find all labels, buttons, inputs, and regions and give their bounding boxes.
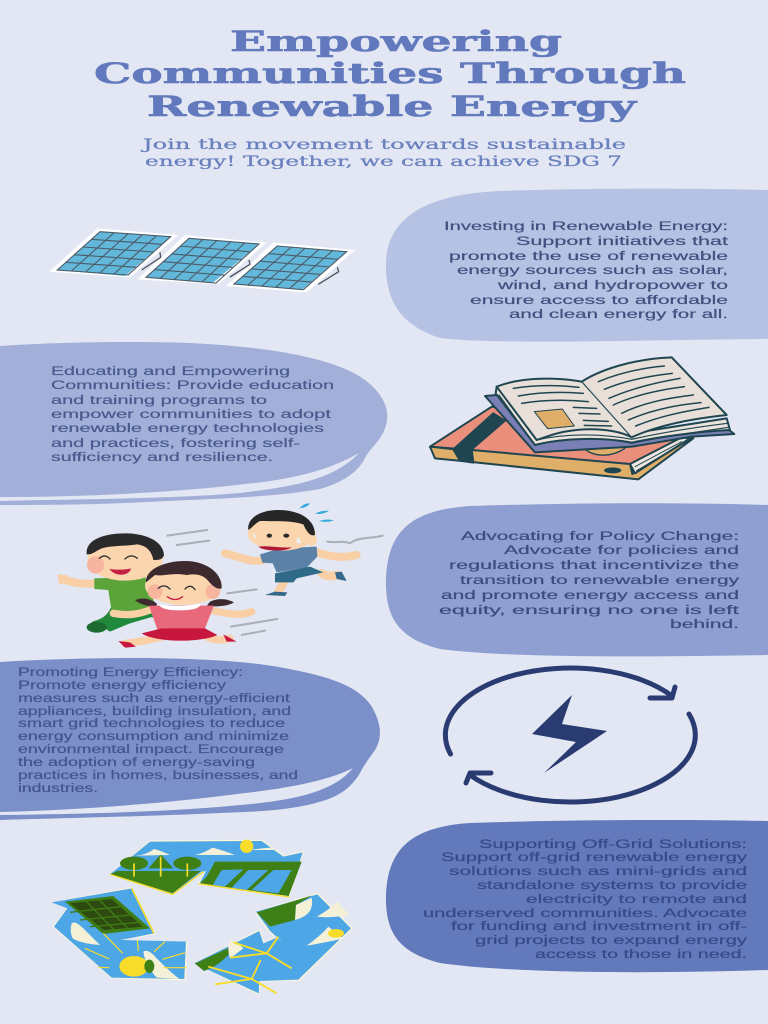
title: Communities Through	[94, 57, 686, 90]
panel: supporting off-grid solutions	[386, 820, 768, 972]
text: promoting: practices in homes, businesses, and	[18, 768, 298, 782]
icon: solar panels	[49, 228, 355, 292]
text: promoting: measures such as energy-efficient	[18, 691, 291, 705]
text: advocating	[439, 529, 741, 631]
icon: energy cycle	[445, 668, 695, 802]
text: advocating: and promote energy access and	[441, 588, 739, 602]
text: supporting: standalone systems to provide	[477, 878, 747, 892]
text: promoting: industries.	[18, 781, 98, 795]
arrow: wind turbines	[193, 893, 353, 995]
text: investing: promote the use of renewable	[449, 249, 728, 263]
text: investing: Investing in Renewable Energy:	[444, 219, 728, 233]
text: promoting: Promote energy efficiency	[18, 678, 227, 692]
arrow: forest and dam	[110, 840, 304, 897]
illustration: recycling symbol of renewable energy	[52, 840, 353, 995]
icon: stack of books	[430, 357, 734, 479]
panel: educating and empowering communities	[0, 342, 387, 505]
text: investing: wind, and hydropower to	[496, 278, 728, 292]
text: investing: ensure access to affordable	[470, 293, 728, 307]
title: Renewable Energy	[147, 90, 637, 123]
boy in blue	[225, 503, 357, 596]
text: advocating: Advocating for Policy Change:	[461, 529, 739, 543]
text: educating: Educating and Empowering	[51, 364, 290, 378]
text: educating: empower communities to adopt	[51, 407, 332, 421]
text: advocating: transition to renewable energy	[460, 573, 741, 587]
text: supporting	[423, 837, 748, 961]
text: supporting: grid projects to expand energy	[475, 933, 748, 947]
text: promoting: the adoption of energy-saving	[18, 755, 255, 769]
text: advocating: equity, ensuring no one is left	[439, 603, 740, 617]
arrow: lower arc	[466, 714, 695, 802]
text: educating: renewable energy technologies	[51, 421, 324, 435]
text: educating: and training programs to	[51, 393, 267, 407]
text: promoting: appliances, building insulation, and	[18, 704, 291, 718]
text: advocating: behind.	[670, 617, 739, 631]
subtitle	[140, 137, 626, 170]
text: investing	[444, 219, 729, 321]
text: supporting: Supporting Off-Grid Solutions:	[479, 837, 747, 851]
text: promoting: Promoting Energy Efficiency:	[18, 665, 243, 679]
boy in green	[57, 533, 164, 633]
open book	[485, 357, 734, 452]
text: educating	[51, 364, 334, 464]
panel: advocating for policy change	[386, 503, 768, 656]
motion lines	[167, 530, 383, 635]
text: supporting: solutions such as mini-grids and	[449, 864, 747, 878]
text: promoting: smart grid technologies to reduce	[18, 716, 285, 730]
text: advocating: Advocate for policies and	[504, 543, 739, 557]
panel: investing in renewable energy	[386, 189, 768, 342]
text: investing: energy sources such as solar,	[457, 263, 728, 277]
text: supporting: access to those in need.	[535, 947, 747, 961]
text: educating: Communities: Provide education	[51, 378, 334, 392]
subtitle: Join the movement towards sustainable	[140, 137, 626, 153]
illustration: running children	[57, 503, 383, 648]
text: investing: and clean energy for all.	[509, 307, 728, 321]
text: educating: sufficiency and resilience.	[51, 450, 273, 464]
text: supporting: underserved communities. Advocate	[423, 906, 747, 920]
text: promoting: environmental impact. Encourage	[18, 742, 284, 756]
text: advocating: regulations that incentivize the	[449, 558, 739, 572]
text: supporting: for funding and investment in off-	[451, 919, 747, 933]
text: educating: and practices, fostering self-	[51, 436, 300, 450]
girl in pink	[113, 561, 252, 648]
lower book	[430, 407, 693, 479]
arrow: upper arc	[445, 668, 675, 754]
title	[94, 25, 686, 123]
text: supporting: electricity to remote and	[526, 892, 747, 906]
arrow: solar panel and sun	[52, 887, 187, 980]
text: investing: Support initiatives that	[516, 234, 729, 248]
text: supporting: Support off-grid renewable energy	[441, 850, 748, 864]
text: promoting: energy consumption and minimize	[18, 729, 289, 743]
subtitle: energy! Together, we can achieve SDG 7	[145, 154, 622, 170]
panel: promoting energy efficiency	[0, 658, 380, 820]
title: Empowering	[230, 25, 562, 58]
text: promoting	[18, 665, 298, 795]
icon: lightning bolt	[532, 695, 607, 773]
